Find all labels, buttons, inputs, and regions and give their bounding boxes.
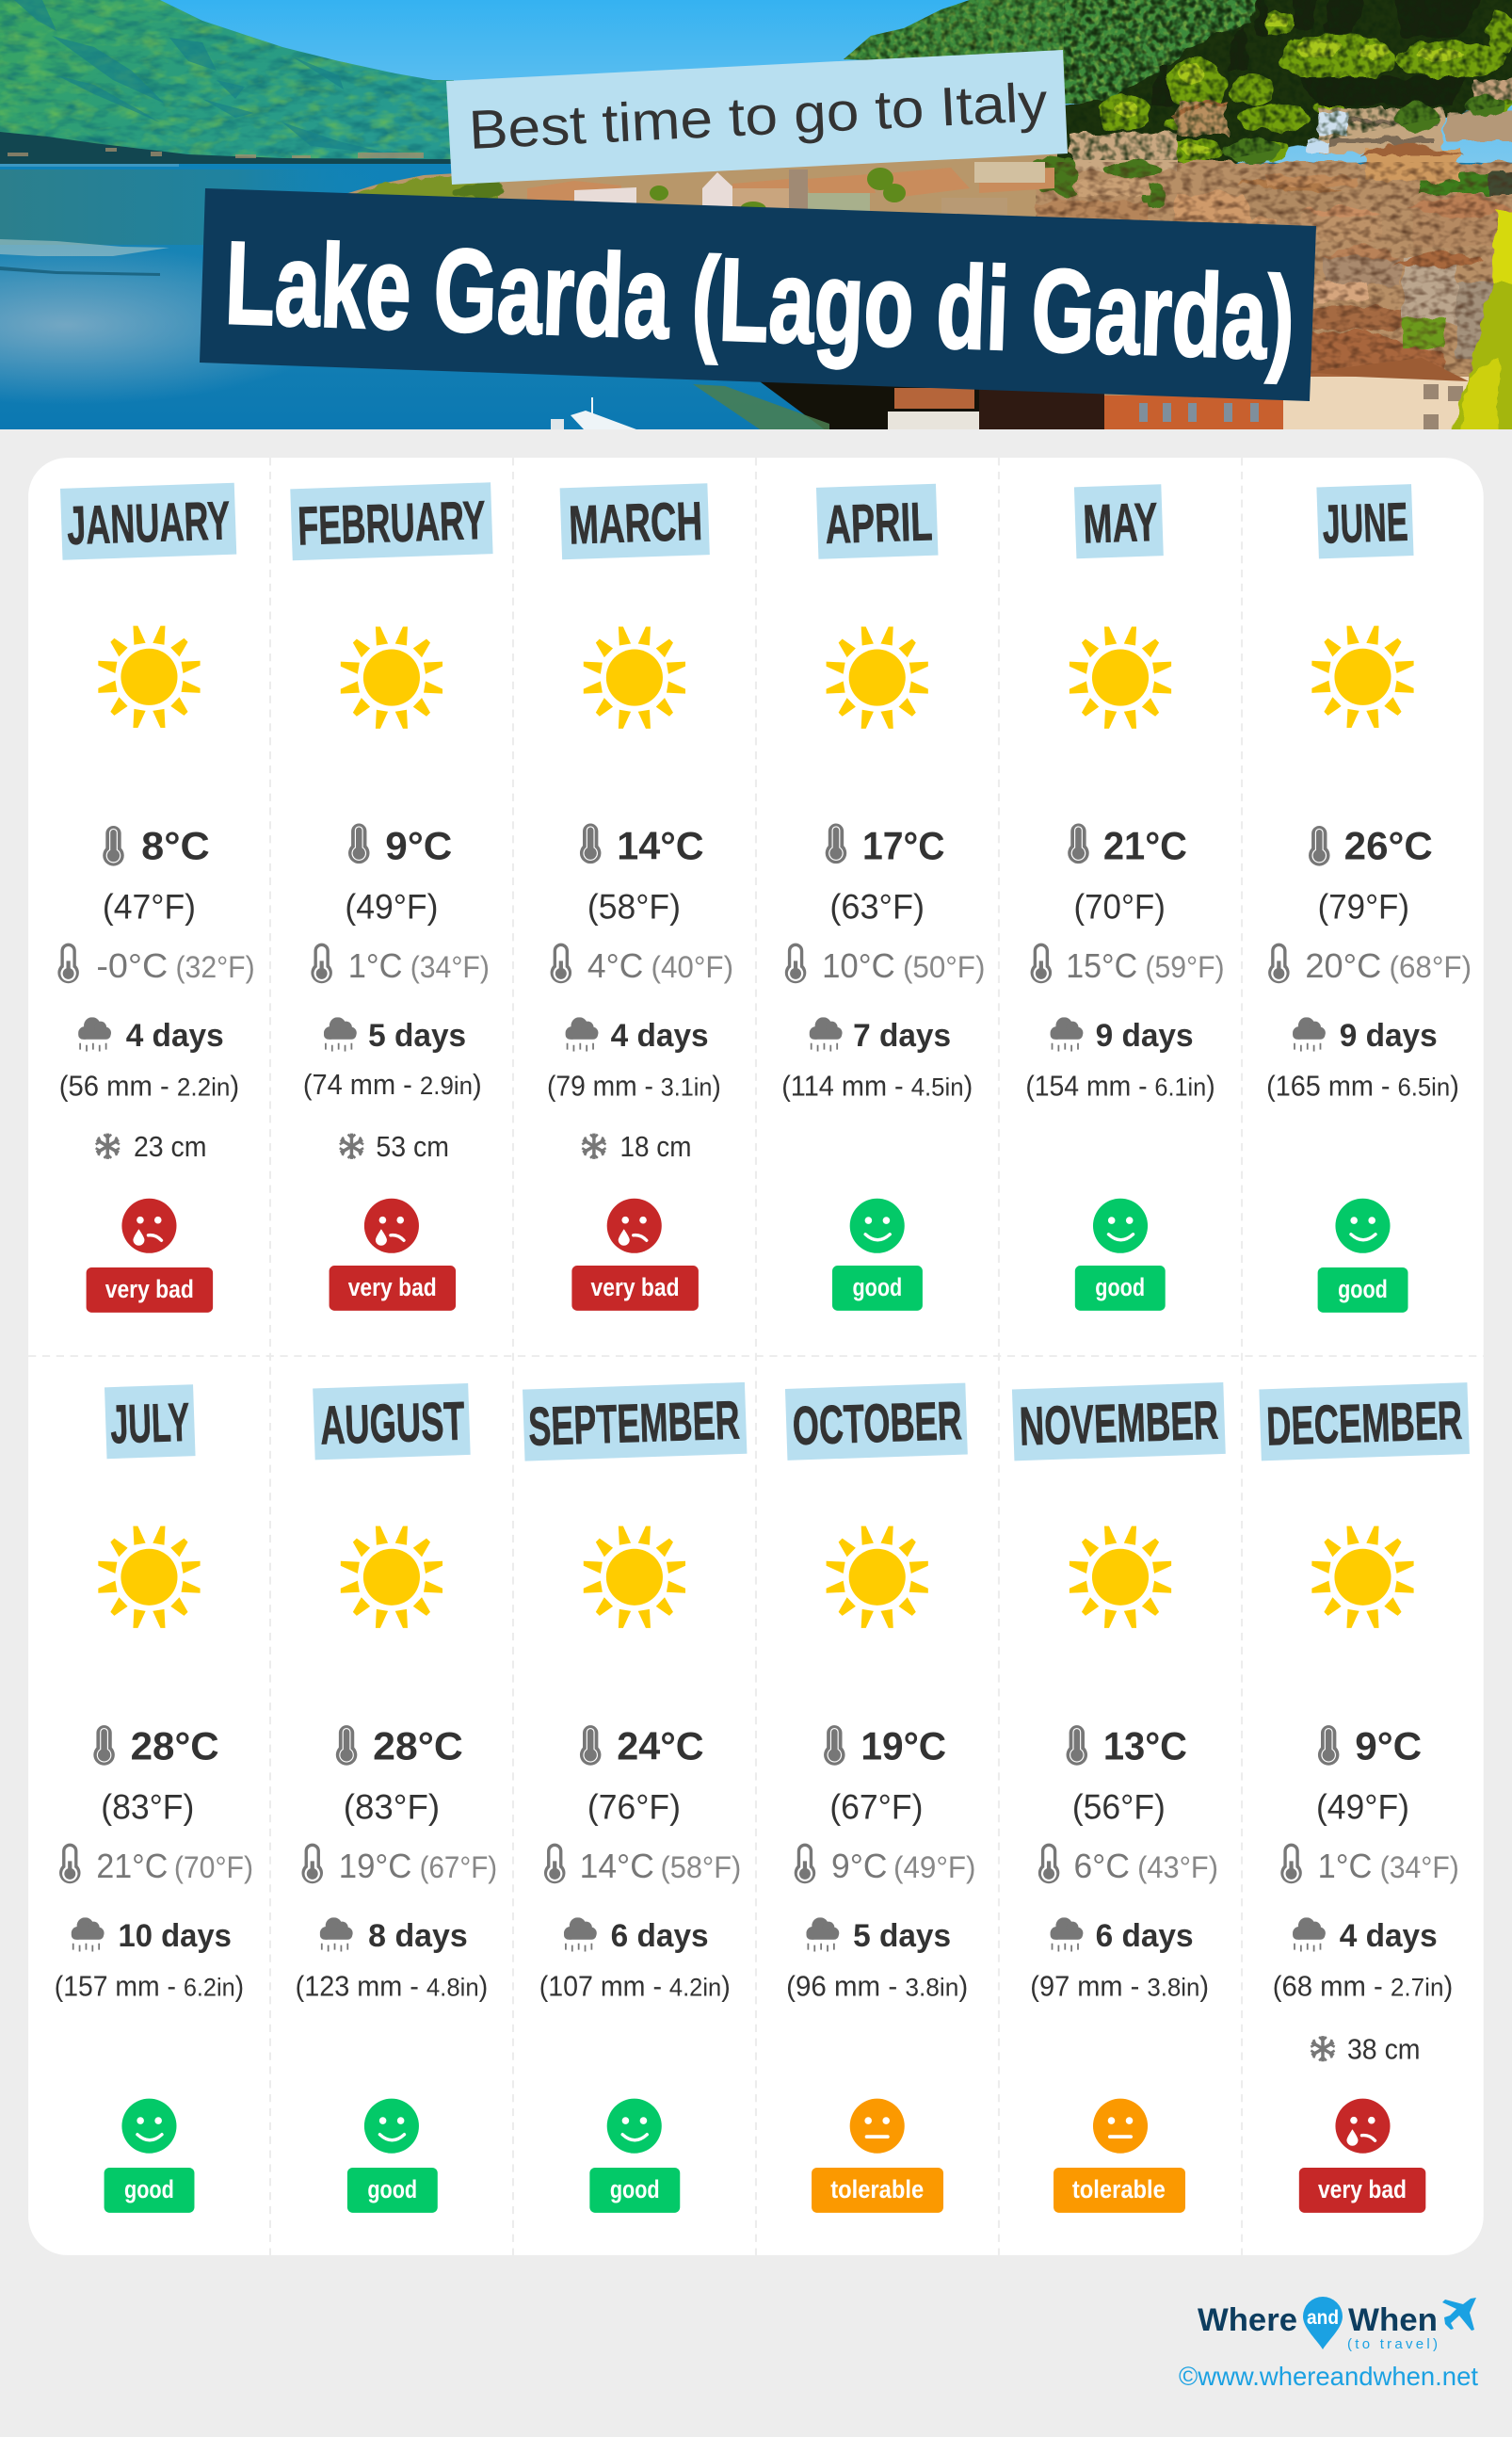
low temperature: (68°F) — [1390, 950, 1472, 984]
rainfall amount: (114 mm - 4.5in) — [781, 1071, 973, 1103]
icon: smiling face — [1093, 1199, 1148, 1253]
month heading: October — [785, 1383, 968, 1461]
icon: sun — [98, 1526, 201, 1628]
month heading: January — [60, 483, 236, 560]
low temperature: (34°F) — [1380, 1850, 1459, 1884]
month heading: June — [1316, 484, 1414, 558]
panel: July — [55, 1384, 253, 2213]
high temperature fahrenheit: (79°F) — [1318, 886, 1409, 926]
rainy days — [78, 1017, 224, 1054]
icon: neutral face — [1093, 2099, 1148, 2154]
low temperature: 1°C — [348, 946, 402, 985]
month heading: November: NOVEMBER — [1019, 1391, 1219, 1458]
high temperature: 8°C — [141, 825, 210, 868]
high temperature fahrenheit: (83°F) — [344, 1786, 440, 1826]
icon: sun — [827, 1526, 928, 1628]
icon: smiling face — [364, 2099, 419, 2154]
panel: June — [1266, 484, 1472, 1313]
low temperature: -0°C — [96, 946, 168, 985]
snowfall: 23 cm — [134, 1131, 207, 1163]
rainfall amount: (96 mm - 3.8in) — [786, 1971, 968, 2003]
snowfall: 38 cm — [1347, 2033, 1421, 2065]
rainy days: 5 days — [368, 1018, 466, 1054]
low temperature: 1°C — [1318, 1847, 1372, 1885]
low temperature: 10°C — [822, 946, 895, 985]
icon: location pin — [1303, 2297, 1343, 2349]
rainy days: 6 days — [611, 1918, 709, 1954]
rainfall amount: (154 mm - 6.1in) — [1025, 1071, 1215, 1103]
high temperature — [580, 1725, 704, 1768]
high temperature fahrenheit: (70°F) — [1073, 886, 1166, 926]
rainfall amount: (68 mm - 2.7in) — [1273, 1971, 1453, 2003]
rating badge: tolerable: tolerable — [1072, 2174, 1166, 2203]
rainfall amount: (56 mm - 2.2in) — [59, 1071, 239, 1103]
rainy days: 4 days — [126, 1018, 224, 1054]
logo: Where and When: Where — [1198, 2302, 1297, 2338]
rating badge: good: good — [852, 1272, 902, 1301]
rating badge: very bad: very bad — [591, 1272, 680, 1301]
rainy days: 6 days — [1096, 1918, 1194, 1954]
rainy days: 5 days — [853, 1918, 951, 1954]
high temperature — [580, 824, 704, 868]
high temperature: 28°C — [131, 1725, 219, 1768]
panel: December — [1259, 1382, 1470, 2213]
rating badge: very bad: very bad — [1318, 2174, 1407, 2203]
rating badge: good — [1318, 1267, 1408, 1313]
high temperature: 9°C — [1355, 1725, 1422, 1768]
rainy days: 8 days — [368, 1918, 468, 1954]
high temperature: 19°C — [861, 1725, 946, 1768]
rating badge: good: good — [1095, 1272, 1145, 1301]
month heading: January: JANUARY — [66, 491, 231, 557]
icon: sun — [1070, 627, 1171, 729]
rainy days — [1293, 1017, 1438, 1054]
icon: sun — [584, 627, 685, 729]
low temperature: (58°F) — [660, 1850, 741, 1884]
rainy days: 10 days — [118, 1918, 232, 1954]
panel: monthly climate table — [28, 458, 1484, 2255]
month heading: May — [1074, 484, 1164, 558]
panel: February — [290, 482, 493, 1311]
rainy days — [324, 1017, 466, 1054]
icon: crying face — [364, 1199, 419, 1253]
icon: smiling face — [607, 2099, 662, 2154]
header photo: Lake Garda — [0, 0, 1512, 452]
low temperature: 6°C — [1073, 1847, 1130, 1885]
month heading: April — [816, 484, 938, 559]
rainfall amount: (74 mm - 2.9in) — [303, 1069, 482, 1101]
rainy days — [810, 1017, 951, 1054]
high temperature — [103, 825, 210, 868]
snowfall — [1311, 2033, 1421, 2065]
high temperature — [336, 1725, 463, 1768]
rating badge: very bad — [330, 1266, 456, 1311]
snowfall: 18 cm — [620, 1131, 691, 1163]
icon: smiling face — [121, 2099, 176, 2154]
panel: April — [781, 484, 985, 1311]
low temperature — [544, 1844, 741, 1885]
high temperature: 28°C — [373, 1725, 463, 1768]
month heading: August — [313, 1383, 471, 1460]
logo: Where and When: (to travel) — [1347, 2336, 1438, 2352]
low temperature: (43°F) — [1137, 1850, 1218, 1884]
rainy days: 4 days — [1340, 1918, 1438, 1954]
rainfall amount: (123 mm - 4.8in) — [296, 1971, 488, 2003]
low temperature — [311, 944, 490, 985]
rating badge: good: good — [1338, 1274, 1388, 1303]
high temperature: 24°C — [617, 1725, 704, 1768]
panel: October — [785, 1383, 976, 2213]
rating badge: very bad: very bad — [105, 1274, 194, 1303]
high temperature: 13°C — [1103, 1725, 1187, 1768]
icon: sun — [827, 627, 928, 729]
rainfall amount: (107 mm - 4.2in) — [539, 1971, 731, 2003]
high temperature: 17°C — [862, 825, 945, 868]
rating badge: tolerable — [812, 2168, 943, 2213]
month heading: June: JUNE — [1322, 492, 1408, 556]
low temperature — [1031, 944, 1225, 985]
rating badge: very bad — [571, 1266, 699, 1311]
snowfall: 53 cm — [376, 1131, 449, 1163]
rainy days — [1293, 1917, 1438, 1954]
high temperature: 9°C — [385, 825, 452, 868]
low temperature: 21°C — [96, 1847, 168, 1885]
high temperature fahrenheit: (63°F) — [829, 886, 925, 926]
low temperature: (34°F) — [410, 950, 490, 984]
logo: Where and When — [1198, 2297, 1476, 2352]
high temperature fahrenheit: (83°F) — [101, 1786, 194, 1826]
rating badge: good: good — [124, 2174, 174, 2203]
rating badge: very bad — [1299, 2168, 1425, 2213]
low temperature — [57, 944, 255, 985]
month heading: July — [105, 1384, 196, 1459]
month heading: July: JULY — [109, 1393, 190, 1456]
low temperature: 20°C — [1305, 946, 1381, 985]
rainy days — [566, 1017, 709, 1054]
icon: sun — [341, 627, 442, 729]
low temperature — [795, 1844, 976, 1885]
low temperature: (67°F) — [420, 1850, 497, 1884]
rainy days: 9 days — [1340, 1018, 1438, 1054]
rainy days: 7 days — [853, 1018, 951, 1054]
high temperature fahrenheit: (47°F) — [103, 886, 196, 926]
rating badge: good: good — [367, 2174, 417, 2203]
low temperature — [1038, 1844, 1218, 1885]
rating badge: good — [589, 2168, 680, 2213]
panel: August — [296, 1383, 497, 2213]
low temperature — [301, 1844, 497, 1885]
icon: airplane — [1442, 2298, 1476, 2331]
low temperature: (50°F) — [903, 950, 985, 984]
month heading: September: SEPTEMBER — [527, 1390, 741, 1458]
low temperature — [1280, 1844, 1459, 1885]
low temperature: 15°C — [1066, 946, 1137, 985]
rating badge: very bad — [87, 1267, 213, 1313]
rating badge: tolerable — [1054, 2168, 1185, 2213]
month heading: March: MARCH — [568, 492, 703, 557]
panel: May — [1025, 484, 1225, 1311]
high temperature fahrenheit: (67°F) — [829, 1786, 923, 1826]
rainy days — [564, 1917, 709, 1954]
icon: crying face — [607, 1199, 662, 1253]
high temperature — [1068, 824, 1187, 868]
month heading: April: APRIL — [824, 492, 933, 556]
rainfall amount: (157 mm - 6.2in) — [55, 1971, 244, 2003]
panel: September — [523, 1382, 747, 2213]
rating badge: good — [347, 2168, 438, 2213]
high temperature: 21°C — [1103, 825, 1187, 868]
panel: November — [1012, 1382, 1226, 2213]
high temperature — [826, 824, 945, 868]
icon: neutral face — [850, 2099, 905, 2154]
icon: smiling face — [1335, 1199, 1391, 1253]
rating badge: good — [832, 1266, 923, 1311]
high temperature fahrenheit: (49°F) — [1316, 1786, 1409, 1826]
snowfall — [96, 1131, 207, 1163]
month heading: February — [290, 482, 493, 560]
rating badge: good — [105, 2168, 194, 2213]
subtitle banner — [446, 50, 1068, 185]
high temperature fahrenheit: (49°F) — [345, 886, 438, 926]
high temperature — [348, 824, 452, 868]
low temperature — [1268, 944, 1472, 985]
month heading: February: FEBRUARY — [297, 491, 487, 557]
low temperature — [59, 1844, 253, 1885]
icon: sun — [584, 1526, 685, 1628]
snowfall — [340, 1131, 449, 1163]
rainfall amount: (165 mm - 6.5in) — [1266, 1071, 1459, 1103]
rainy days: 9 days — [1096, 1018, 1194, 1054]
icon: sun — [1311, 1526, 1414, 1628]
high temperature — [1067, 1725, 1187, 1768]
low temperature: 9°C — [831, 1847, 887, 1885]
low temperature: 19°C — [339, 1847, 411, 1885]
rating badge: very bad: very bad — [348, 1272, 437, 1301]
high temperature — [93, 1725, 219, 1768]
rainy days — [1051, 1017, 1194, 1054]
rainfall amount: (79 mm - 3.1in) — [547, 1071, 721, 1103]
rating badge: good: good — [610, 2174, 660, 2203]
subtitle banner: Best time to go to Italy — [467, 72, 1049, 161]
icon: sun — [1311, 626, 1414, 728]
high temperature — [1318, 1725, 1422, 1768]
low temperature: 4°C — [587, 946, 643, 985]
month heading: November — [1012, 1382, 1226, 1461]
high temperature fahrenheit: (58°F) — [587, 886, 681, 926]
month heading: October: OCTOBER — [792, 1391, 963, 1457]
icon: sun — [1070, 1526, 1171, 1628]
rainy days — [72, 1917, 232, 1954]
high temperature: 26°C — [1344, 825, 1433, 868]
high temperature — [824, 1725, 946, 1768]
high temperature — [1309, 825, 1433, 868]
high temperature fahrenheit: (56°F) — [1072, 1786, 1166, 1826]
icon: crying face — [1335, 2099, 1391, 2154]
rainy days — [806, 1917, 951, 1954]
low temperature: (70°F) — [174, 1850, 253, 1884]
low temperature: 14°C — [580, 1847, 654, 1885]
high temperature fahrenheit: (76°F) — [587, 1786, 681, 1826]
snowfall — [582, 1131, 691, 1163]
logo: Where and When: When — [1348, 2302, 1438, 2338]
month heading: August: AUGUST — [319, 1392, 466, 1457]
high temperature: 14°C — [617, 825, 704, 868]
low temperature — [785, 944, 985, 985]
icon: crying face — [121, 1199, 176, 1253]
rainy days — [1051, 1917, 1194, 1954]
rainy days: 4 days — [611, 1018, 709, 1054]
rating badge: tolerable: tolerable — [830, 2174, 924, 2203]
low temperature — [551, 944, 733, 985]
icon: smiling face — [850, 1199, 905, 1253]
logo: Where and When: and — [1307, 2307, 1339, 2329]
month heading: May: MAY — [1082, 492, 1159, 555]
icon: sun — [341, 1526, 442, 1628]
rainfall amount: (97 mm - 3.8in) — [1030, 1971, 1209, 2003]
rainy days — [320, 1917, 468, 1954]
month heading: September — [523, 1382, 747, 1461]
low temperature: (59°F) — [1145, 950, 1225, 984]
month heading: March — [560, 483, 710, 559]
panel: March — [547, 483, 733, 1311]
icon: sun — [98, 626, 201, 728]
low temperature: (40°F) — [651, 950, 733, 984]
low temperature: (49°F) — [893, 1850, 976, 1884]
website credit: ©www.whereandwhen.net — [1179, 2362, 1478, 2391]
rating badge: good — [1075, 1266, 1166, 1311]
panel: January — [57, 483, 255, 1313]
low temperature: (32°F) — [176, 950, 255, 984]
